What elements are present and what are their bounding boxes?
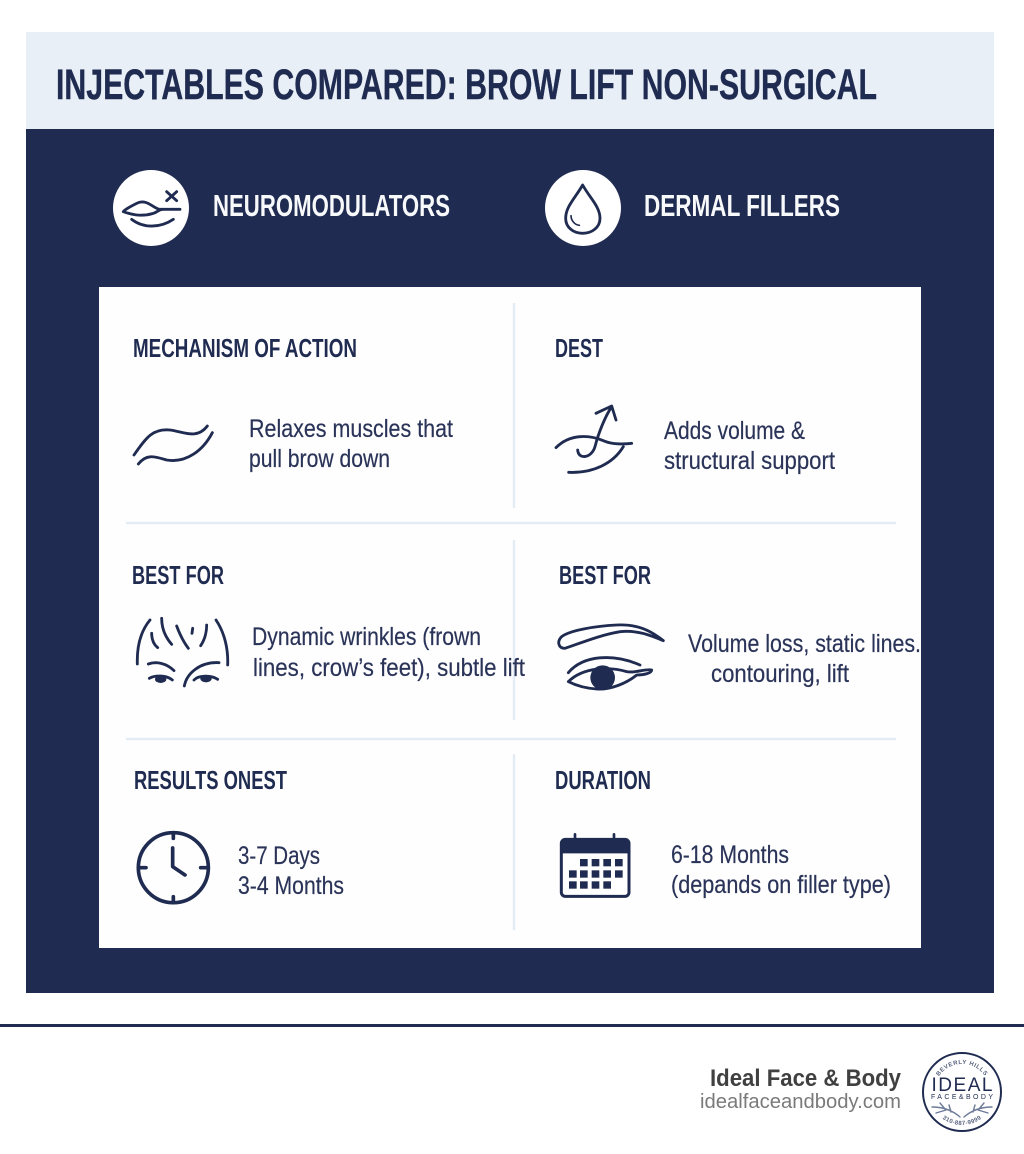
text [688, 630, 921, 688]
icon: calendar [561, 834, 629, 896]
text: 6-18 Months [671, 841, 789, 869]
text: 3-4 Months [238, 872, 344, 900]
text [671, 841, 891, 899]
column header: neuromodulators [113, 170, 450, 246]
cell: dest [555, 333, 835, 475]
text: 3-7 Days [238, 842, 320, 870]
text [664, 417, 835, 475]
text: (depands on filler type) [671, 871, 891, 899]
icon: relaxed muscle with x [113, 170, 189, 246]
text [249, 415, 453, 473]
heading: BEST FOR [559, 560, 651, 590]
heading: DEST [555, 333, 603, 363]
heading: RESULTS ONEST [134, 765, 287, 795]
logo badge [922, 1052, 1002, 1132]
icon: forehead wrinkles and eyes [137, 618, 228, 686]
logo badge: FACE&BODY [931, 1094, 993, 1101]
heading: dermal fillers: DERMAL FILLERS [644, 188, 840, 223]
cell: best for dermal fillers [559, 560, 921, 690]
icon: brow and eye [559, 625, 663, 690]
text: Relaxes muscles that [249, 415, 453, 443]
text: Volume loss, static lines. [688, 630, 921, 658]
heading: MECHANISM OF ACTION [133, 333, 357, 363]
white comparison panel [99, 287, 921, 948]
footer brand text [700, 1065, 902, 1113]
icon: muscle wave [134, 426, 212, 464]
title banner [26, 32, 994, 129]
text: structural support [664, 447, 835, 475]
cell: best for neuromodulators [132, 560, 525, 686]
text: pull brow down [249, 445, 390, 473]
text [252, 623, 525, 682]
footer rule [0, 1024, 1024, 1027]
heading: BEST FOR [132, 560, 224, 590]
text: Dynamic wrinkles (frown [252, 623, 481, 651]
icon: clock [138, 833, 208, 903]
icon: water drop [545, 170, 621, 246]
logo badge: IDEAL [932, 1075, 992, 1096]
cell: duration [555, 765, 891, 899]
logo badge: 310-887-9999 [942, 1116, 981, 1125]
heading: DURATION [555, 765, 651, 795]
text: lines, crow’s feet), subtle lift [253, 654, 525, 682]
heading: neuromodulators: NEUROMODULATORS [213, 188, 450, 223]
text [238, 842, 344, 900]
cell: results onset [134, 765, 344, 903]
footer brand text: Ideal Face & Body [710, 1065, 902, 1092]
text: contouring, lift [711, 660, 849, 688]
logo badge: BEVERLY HILLS [936, 1060, 988, 1076]
text: Adds volume & [664, 417, 805, 445]
icon: lift arrow over waves [556, 406, 632, 472]
footer brand text: idealfaceandbody.com [700, 1091, 901, 1113]
column header: dermal fillers [545, 170, 840, 246]
navy main panel [26, 129, 994, 993]
cell: mechanism of action [133, 333, 453, 473]
